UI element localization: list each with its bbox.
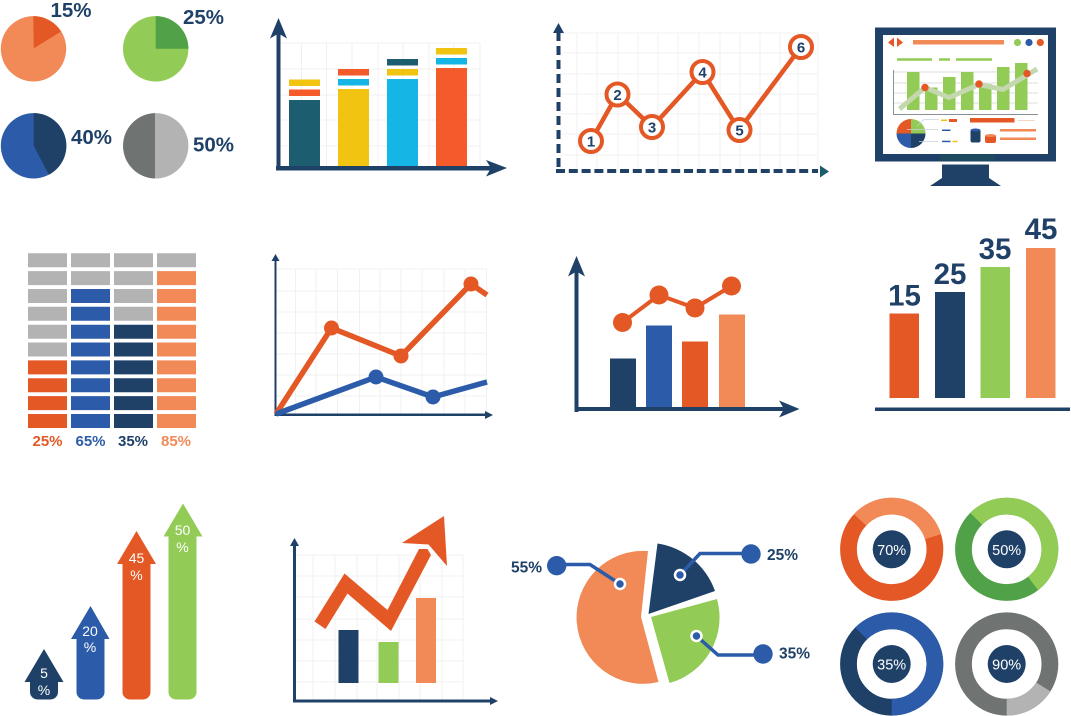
- orange line: [591, 47, 801, 141]
- axes with arrows: [272, 254, 493, 419]
- bar 4: [436, 48, 467, 166]
- column 65%: [71, 253, 110, 450]
- point 6: 6: [797, 40, 805, 56]
- point 4: 4: [698, 64, 707, 82]
- arrow 5%: %: [38, 682, 50, 698]
- donut 90%: [947, 604, 1066, 716]
- arrow 50%: [164, 504, 202, 700]
- bar 25: 25: [934, 258, 966, 291]
- donut 35%: [831, 603, 953, 716]
- point 2: [606, 84, 628, 106]
- column 85%: [157, 253, 196, 450]
- bar 15: [888, 280, 921, 398]
- line with dots: [613, 276, 741, 332]
- point 1: [580, 130, 602, 152]
- panel: two-series line chart: [272, 254, 493, 419]
- screen cylinders: [970, 128, 996, 143]
- point 5: [728, 119, 750, 141]
- arrow 20%: %: [84, 639, 96, 655]
- panel: percentage block columns: [28, 253, 196, 450]
- monitor stand: [930, 164, 1001, 186]
- panel: four donut charts: [831, 488, 1068, 716]
- bar 45: 45: [1025, 213, 1057, 246]
- donut 35%: 35%: [877, 658, 906, 674]
- stand shadow: [940, 154, 995, 161]
- panel: exploded pie with callouts: [511, 544, 810, 684]
- panel: four pie charts: [1, 0, 234, 178]
- axes with arrows: [270, 18, 507, 176]
- point 3: 3: [648, 120, 656, 136]
- donut 70%: [831, 488, 953, 610]
- slice 35%: [651, 599, 720, 683]
- screen: [883, 35, 1048, 154]
- bar 3: [387, 59, 418, 166]
- bar 35: [979, 233, 1011, 398]
- callout 25%: [675, 544, 798, 580]
- bar 15: 15: [888, 280, 921, 312]
- panel: growth chart with arrow: [290, 516, 498, 705]
- arrow 20%: 20: [82, 623, 98, 639]
- axes with arrows: [290, 538, 498, 705]
- bar 35: 35: [979, 233, 1011, 266]
- point 6: [790, 36, 812, 58]
- column 25%: 25%: [32, 433, 63, 450]
- donut 70%: 70%: [877, 543, 906, 559]
- callout 55%: 55%: [511, 560, 542, 576]
- bar 25: [934, 258, 966, 398]
- panel: numbered line chart: [553, 23, 829, 178]
- pie: 25%: 25%: [183, 6, 224, 29]
- point 2: 2: [613, 87, 622, 104]
- pie: 50%: 50%: [193, 134, 234, 156]
- callout 55%: [511, 556, 625, 589]
- arrow 45%: [117, 531, 156, 700]
- blue series: [276, 370, 487, 414]
- arrow 50%: %: [176, 539, 189, 555]
- column 35%: [114, 253, 153, 450]
- slice 25%: [648, 544, 715, 614]
- screen legend: [941, 118, 1036, 142]
- monitor frame: [875, 28, 1056, 162]
- bars: [338, 598, 436, 683]
- panel: labelled bar chart: [875, 213, 1070, 411]
- point 3: [641, 116, 663, 138]
- arrow 5%: 5: [40, 665, 48, 681]
- rising arrow: [314, 516, 447, 631]
- arrow 45%: %: [130, 567, 143, 583]
- baseline: [875, 408, 1070, 411]
- callout 25%: 25%: [767, 547, 798, 564]
- point 1: 1: [587, 134, 595, 150]
- arrow 5%: [24, 649, 64, 700]
- panel: computer monitor dashboard: [875, 28, 1056, 186]
- column 85%: 85%: [161, 433, 191, 450]
- axes with arrows: [568, 256, 800, 418]
- donut 90%: 90%: [992, 658, 1021, 674]
- column 25%: [28, 253, 67, 450]
- slice 55%: [577, 551, 658, 684]
- window toolbar: [888, 38, 1044, 47]
- pie: 40%: [1, 113, 112, 178]
- screen chart: [893, 60, 1038, 114]
- panel: bars with line overlay: [568, 256, 800, 418]
- donut 50%: [946, 488, 1068, 610]
- dashed axes: [553, 23, 829, 178]
- column 35%: 35%: [118, 433, 148, 450]
- callout 35%: 35%: [779, 646, 810, 662]
- orange series: [276, 276, 487, 414]
- panel: stacked bar chart: [270, 18, 507, 176]
- panel: arrow bars: [24, 504, 202, 700]
- arrow 20%: [71, 606, 110, 700]
- point 5: 5: [735, 122, 744, 140]
- bar 45: [1025, 213, 1057, 398]
- callout 35%: [692, 631, 810, 664]
- screen pie: [896, 119, 939, 148]
- point 4: [692, 61, 714, 83]
- bar 1: [289, 80, 320, 166]
- column 65%: 65%: [75, 433, 106, 450]
- arrow 50%: 50: [175, 522, 190, 538]
- pie: 50%: [123, 113, 234, 178]
- bars: [610, 314, 745, 408]
- arrow 45%: 45: [129, 550, 144, 566]
- pie: 25%: [123, 6, 224, 82]
- pie: 15%: [1, 0, 92, 82]
- bar 2: [338, 69, 369, 166]
- donut 50%: 50%: [992, 543, 1021, 559]
- pie: 40%: 40%: [71, 126, 112, 149]
